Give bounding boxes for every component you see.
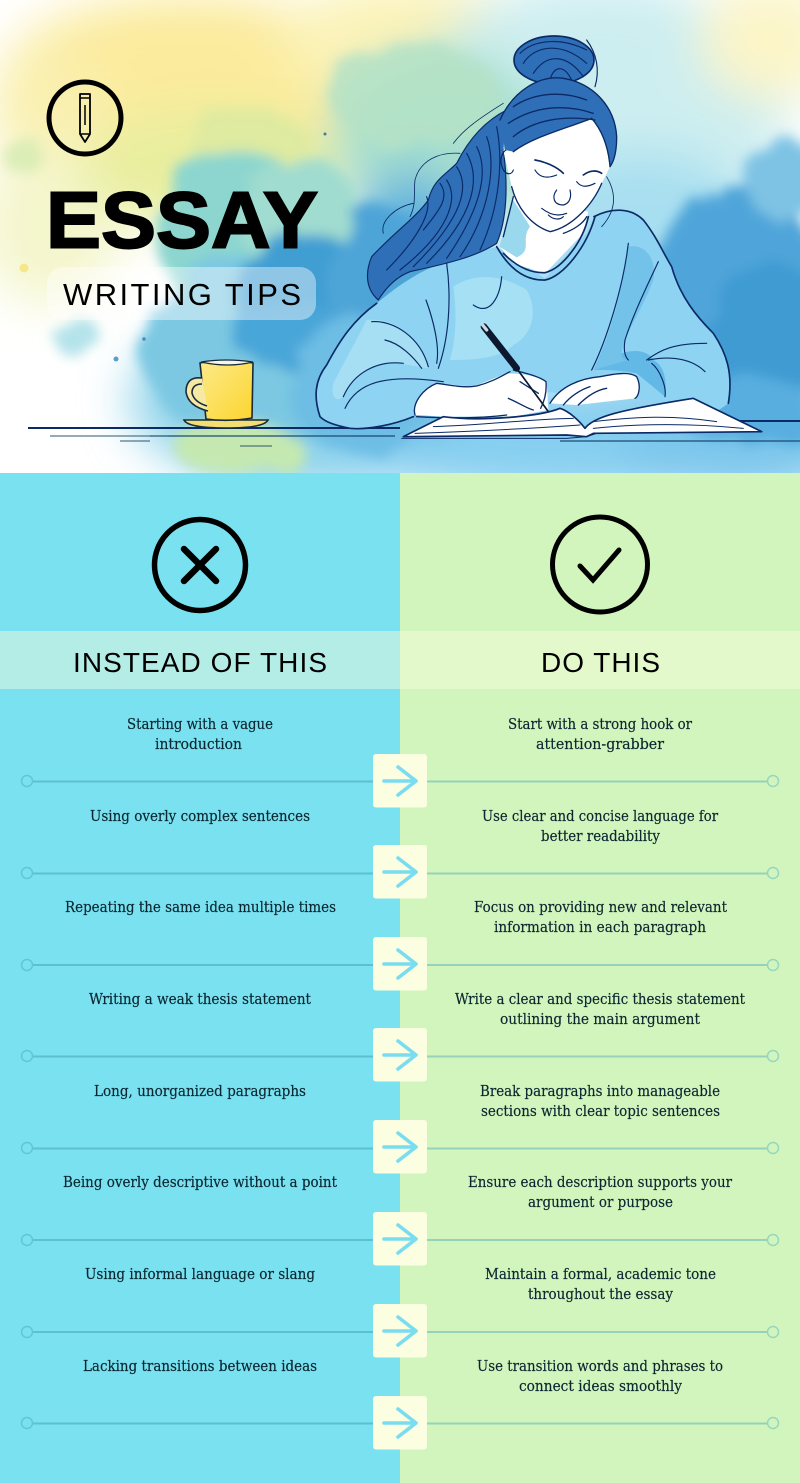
subtitle pill: writing tips: WRITING TIPS	[63, 277, 301, 312]
sweater shading	[450, 277, 533, 360]
heading band: do this: DO THIS	[541, 647, 660, 678]
heading band: instead of this: INSTEAD OF THIS	[73, 647, 327, 678]
left cuff and hand	[415, 373, 548, 417]
list: recommendations: sections with clear topic sentences	[481, 1102, 720, 1120]
list: mistakes	[63, 715, 337, 1375]
arrow row 4	[22, 1028, 778, 1082]
list: recommendations: Ensure each description supports your	[468, 1173, 733, 1191]
ear	[501, 148, 513, 174]
illustration: coffee cup	[184, 360, 268, 428]
list: mistakes: Being overly descriptive without a point	[63, 1173, 337, 1191]
hero watercolor background	[0, 0, 800, 500]
neck	[500, 197, 588, 273]
list: recommendations: Write a clear and specific thesis statement	[455, 990, 745, 1008]
list: mistakes: Repeating the same idea multiple times	[65, 898, 336, 916]
list: mistakes: Writing a weak thesis statement	[89, 990, 311, 1008]
arrow row 3	[22, 937, 778, 990]
illustration: table lines	[28, 421, 800, 446]
panel: instead of this	[0, 473, 400, 1483]
icon: check in circle	[552, 517, 648, 612]
list: recommendations: throughout the essay	[528, 1285, 673, 1303]
list: recommendations: Start with a strong hook or	[508, 715, 693, 733]
list: recommendations: Use clear and concise language for	[482, 807, 719, 825]
list: mistakes: Using informal language or slang	[85, 1265, 315, 1283]
arrow row 2	[22, 845, 778, 898]
arrow row 5	[22, 1120, 778, 1174]
bun	[514, 36, 594, 84]
list: recommendations: Break paragraphs into manageable	[480, 1082, 720, 1100]
heading band: do this	[400, 631, 800, 689]
pen	[484, 327, 517, 368]
wisps of hair	[383, 103, 614, 233]
list: recommendations: connect ideas smoothly	[519, 1377, 682, 1395]
arrow row 1	[22, 754, 778, 808]
icon: cross in circle	[154, 520, 246, 610]
title: ESSAY: ESSAY	[46, 176, 318, 264]
arrow row 8	[22, 1396, 778, 1450]
icon: pencil in circle	[49, 82, 121, 154]
list: mistakes: Starting with a vague	[127, 715, 273, 733]
head hair	[500, 78, 617, 167]
list: recommendations: argument or purpose	[528, 1193, 673, 1211]
right hand	[550, 374, 639, 405]
list: recommendations	[455, 715, 745, 1395]
list: recommendations: attention-grabber	[536, 735, 665, 753]
arrow row 6	[22, 1212, 778, 1266]
list: recommendations: better readability	[541, 827, 660, 845]
list: recommendations: Focus on providing new and relevant	[474, 898, 727, 916]
list: mistakes: Long, unorganized paragraphs	[94, 1082, 306, 1100]
list: recommendations: Use transition words and phrases to	[477, 1357, 723, 1375]
facial outline	[503, 183, 602, 237]
list: mistakes: Lacking transitions between ideas	[83, 1357, 317, 1375]
list: mistakes: Using overly complex sentences	[90, 807, 310, 825]
arrow row 7	[22, 1304, 778, 1358]
collar	[497, 217, 595, 280]
open book	[403, 398, 762, 437]
heading band: instead of this	[0, 631, 400, 689]
long hair	[367, 110, 507, 300]
list: recommendations: information in each paragraph	[494, 918, 706, 936]
illustration: woman writing	[316, 36, 762, 438]
face	[503, 120, 610, 210]
list: recommendations: Maintain a formal, academic tone	[485, 1265, 716, 1283]
face features	[535, 160, 602, 175]
list: mistakes: introduction	[155, 735, 242, 753]
sweater	[316, 210, 730, 429]
panel: do this	[400, 473, 800, 1483]
list: recommendations: outlining the main argument	[500, 1010, 700, 1028]
subtitle pill: writing tips	[47, 267, 316, 320]
divider rows with arrows	[22, 754, 778, 1450]
